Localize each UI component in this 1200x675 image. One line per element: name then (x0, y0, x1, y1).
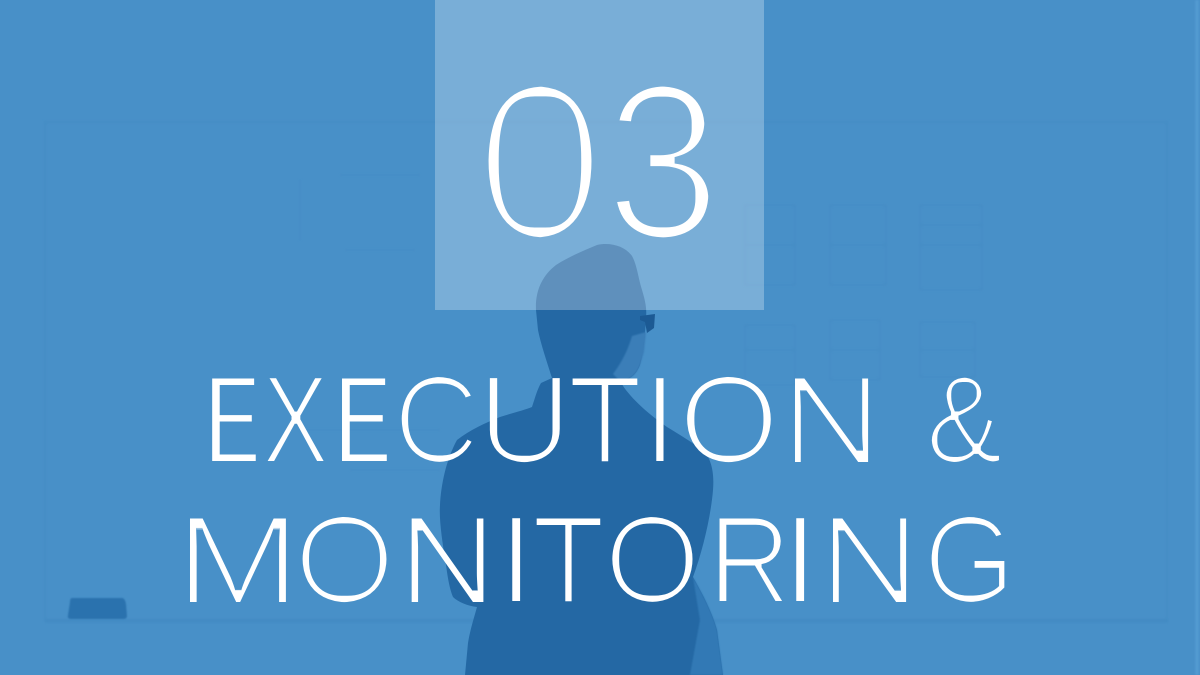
title line 2: M (174, 492, 301, 629)
title line 2 (174, 490, 1016, 630)
title line 1: I (649, 349, 671, 489)
title line 2: G (923, 490, 1016, 629)
face (613, 332, 646, 381)
title line 1: T (567, 351, 643, 490)
title line 2: R (708, 490, 791, 630)
glasses (640, 314, 655, 333)
section number: 0 (474, 38, 606, 285)
title line 1 (206, 349, 1003, 490)
whiteboard sketches (300, 175, 982, 470)
eraser (68, 598, 127, 619)
title line 1: E (335, 350, 390, 490)
title line 2: N (818, 492, 921, 629)
title line 1: X (263, 349, 328, 489)
title line 2: O (604, 491, 701, 629)
lower arm (690, 577, 723, 675)
title line 1: & (926, 350, 1003, 489)
section number: 3 (605, 39, 720, 286)
title line 1: C (393, 349, 480, 489)
title line 1: E (206, 351, 259, 490)
title line 1: U (477, 351, 572, 490)
title line 1: O (678, 351, 780, 490)
section number (474, 38, 720, 286)
person silhouette (440, 244, 723, 675)
title line 2: N (398, 491, 497, 629)
number panel (435, 0, 764, 310)
title line 2: I (505, 491, 528, 630)
title line 1: N (780, 352, 883, 489)
title line 2: I (789, 491, 812, 630)
title line 2: T (532, 491, 605, 630)
title line 2: O (293, 491, 396, 630)
